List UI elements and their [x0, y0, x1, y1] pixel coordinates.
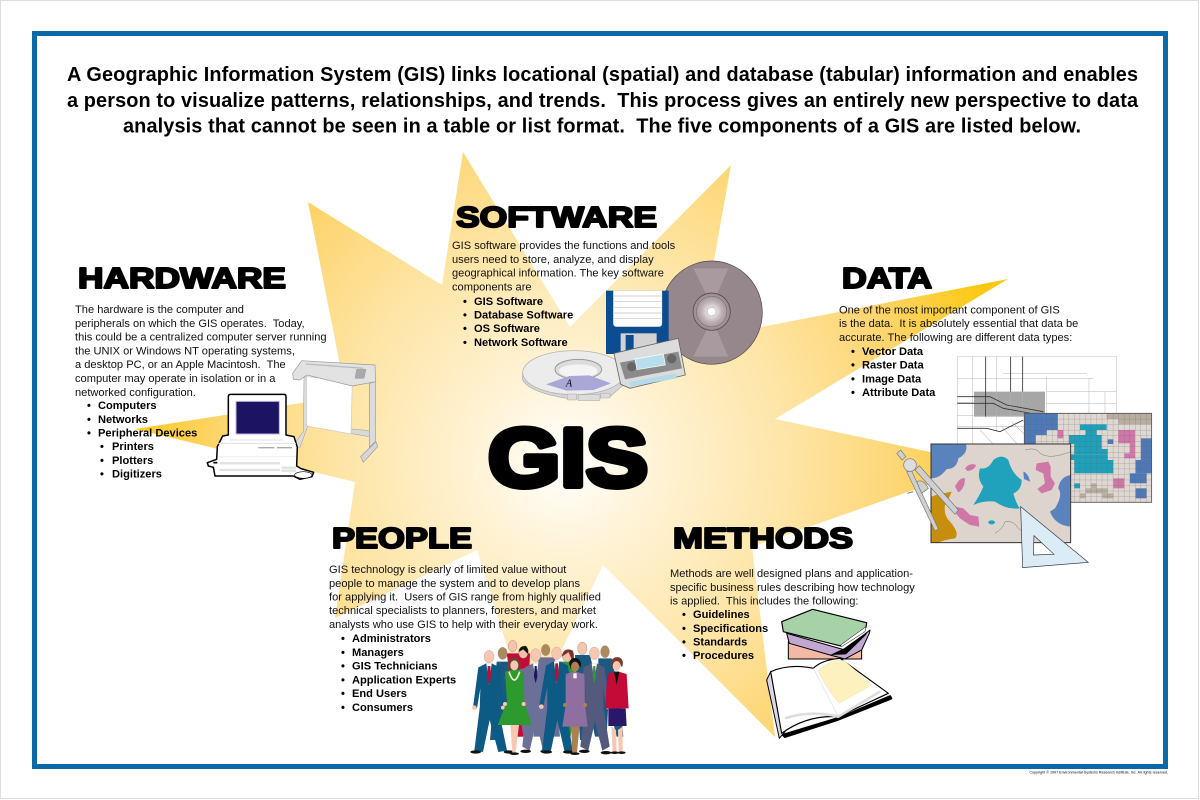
front man teal centre	[539, 647, 574, 754]
intro text: A Geographic Information System (GIS) links locational (spatial) and database (tabular) information and enables	[67, 64, 1138, 86]
people description	[329, 564, 601, 631]
methods list: •	[682, 650, 686, 662]
people list: Application Experts	[352, 674, 456, 686]
heading: methods: METHODS	[673, 523, 853, 555]
hardware description: networked configuration.	[75, 387, 196, 399]
software list: OS Software	[474, 323, 540, 335]
methods list: •	[682, 636, 686, 648]
hardware list: Printers	[112, 441, 154, 453]
heading: people: PEOPLE	[332, 523, 472, 555]
hardware list: •	[87, 428, 91, 440]
icon: tape reel: A	[565, 379, 573, 390]
data list: Raster Data	[862, 360, 924, 372]
front man slate	[578, 647, 611, 754]
people list: Managers	[352, 647, 404, 659]
icon: stacked books	[782, 609, 870, 659]
people list: Administrators	[352, 633, 431, 645]
woman purple	[562, 658, 588, 755]
data list: Vector Data	[862, 346, 924, 358]
front man gray	[520, 649, 552, 753]
icon: group of people	[470, 640, 629, 755]
methods list: Standards	[693, 636, 747, 648]
methods list	[682, 609, 768, 662]
heading: hardware: HARDWARE	[78, 263, 286, 295]
software list: Network Software	[474, 337, 568, 349]
back row bodies	[490, 653, 623, 740]
data description	[839, 304, 1078, 344]
software description: components are	[452, 282, 532, 294]
data description: accurate. The following are different data types:	[839, 332, 1072, 344]
people description: for applying it. Users of GIS range from highly qualified	[329, 592, 601, 604]
central title GIS: GIS	[488, 411, 648, 504]
people description: analysts who use GIS to help with their everyday work.	[329, 619, 598, 631]
methods list: Specifications	[693, 623, 768, 635]
data list: Attribute Data	[862, 387, 936, 399]
hardware list: Digitizers	[112, 468, 162, 480]
methods description: is applied. This includes the following:	[670, 596, 858, 608]
icon: floppy disk	[606, 291, 669, 354]
panel: software	[452, 202, 762, 401]
data list: Image Data	[862, 374, 922, 386]
people list: •	[341, 674, 345, 686]
people list	[341, 633, 456, 714]
methods list: •	[682, 609, 686, 621]
methods description: specific business rules describing how technology	[670, 582, 915, 594]
hardware description: computer may operate in isolation or in a	[75, 373, 276, 385]
people list: •	[341, 647, 345, 659]
heading: data: DATA	[842, 263, 932, 295]
software description: GIS software provides the functions and tools	[452, 240, 676, 252]
copyright note: Copyright © 1997 Environmental Systems Research Institute, Inc. All rights reserved.	[1029, 770, 1168, 774]
software description	[452, 240, 676, 294]
software list	[463, 296, 573, 349]
intro text: a person to visualize patterns, relationships, and trends. This process gives an entirely new perspective to data	[67, 90, 1139, 112]
heading: software: SOFTWARE	[456, 202, 657, 234]
people list: Consumers	[352, 702, 413, 714]
data description: One of the most important component of GIS	[839, 304, 1060, 316]
panel: methods	[670, 523, 915, 738]
people description: GIS technology is clearly of limited value without	[329, 564, 566, 576]
icon: desktop computer	[207, 394, 314, 479]
software list: •	[463, 323, 467, 335]
data list: •	[851, 374, 855, 386]
hardware description: peripherals on which the GIS operates. Today,	[75, 318, 305, 330]
people list: •	[341, 660, 345, 672]
hardware list: •	[87, 400, 91, 412]
people description: technical specialists to planners, foresters, and market	[329, 605, 596, 617]
software list: Database Software	[474, 310, 573, 322]
icon: tape reel	[523, 351, 625, 401]
software list: •	[463, 296, 467, 308]
icon: tape cartridge	[614, 338, 685, 388]
intro text: analysis that cannot be seen in a table or list format. The five components of a GIS are listed below.	[123, 116, 1081, 138]
hardware list: Plotters	[112, 455, 153, 467]
methods description: Methods are well designed plans and application-	[670, 568, 913, 580]
starburst background	[135, 152, 1008, 737]
icon: open book	[767, 658, 891, 738]
data list: •	[851, 346, 855, 358]
people list: End Users	[352, 688, 407, 700]
hardware list: Peripheral Devices	[98, 428, 197, 440]
hardware description: the UNIX or Windows NT operating systems,	[75, 346, 295, 358]
woman red	[605, 657, 629, 754]
data list: •	[851, 387, 855, 399]
panel: hardware	[75, 263, 378, 480]
software list: •	[463, 337, 467, 349]
people description: people to manage the system and to develop plans	[329, 578, 580, 590]
hardware list: Computers	[98, 400, 157, 412]
methods list: Procedures	[693, 650, 754, 662]
data list: •	[851, 360, 855, 372]
people list: GIS Technicians	[352, 660, 438, 672]
hardware list	[87, 400, 197, 480]
people list: •	[341, 688, 345, 700]
hardware description	[75, 304, 327, 399]
methods description	[670, 568, 915, 608]
intro text	[67, 64, 1139, 138]
methods list: Guidelines	[693, 609, 750, 621]
woman green	[498, 657, 532, 755]
software description: geographical information. The key software	[452, 268, 664, 280]
icon: street map	[957, 357, 1117, 445]
hardware list: •	[100, 468, 104, 480]
icon: set square	[1021, 507, 1088, 568]
icon: drafting compass	[897, 450, 958, 531]
icon: raster map	[1024, 413, 1152, 502]
hardware list: •	[87, 414, 91, 426]
hardware list: Networks	[98, 414, 148, 426]
front man teal left	[470, 650, 514, 754]
icon: vector map	[931, 444, 1071, 543]
people list: •	[341, 633, 345, 645]
software description: users need to store, analyze, and display	[452, 254, 654, 266]
hardware description: this could be a centralized computer server running	[75, 332, 327, 344]
icon: CD disc	[661, 261, 762, 364]
panel: people	[329, 523, 629, 755]
hardware list: •	[100, 441, 104, 453]
hardware description: a desktop PC, or an Apple Macintosh. The	[75, 359, 286, 371]
hardware list: •	[100, 455, 104, 467]
hardware description: The hardware is the computer and	[75, 304, 244, 316]
software list: •	[463, 310, 467, 322]
icon: plotter	[293, 361, 378, 462]
data list	[851, 346, 936, 399]
data description: is the data. It is absolutely essential that data be	[839, 318, 1078, 330]
methods list: •	[682, 623, 686, 635]
panel: data	[839, 263, 1152, 568]
people list: •	[341, 702, 345, 714]
software list: GIS Software	[474, 296, 543, 308]
